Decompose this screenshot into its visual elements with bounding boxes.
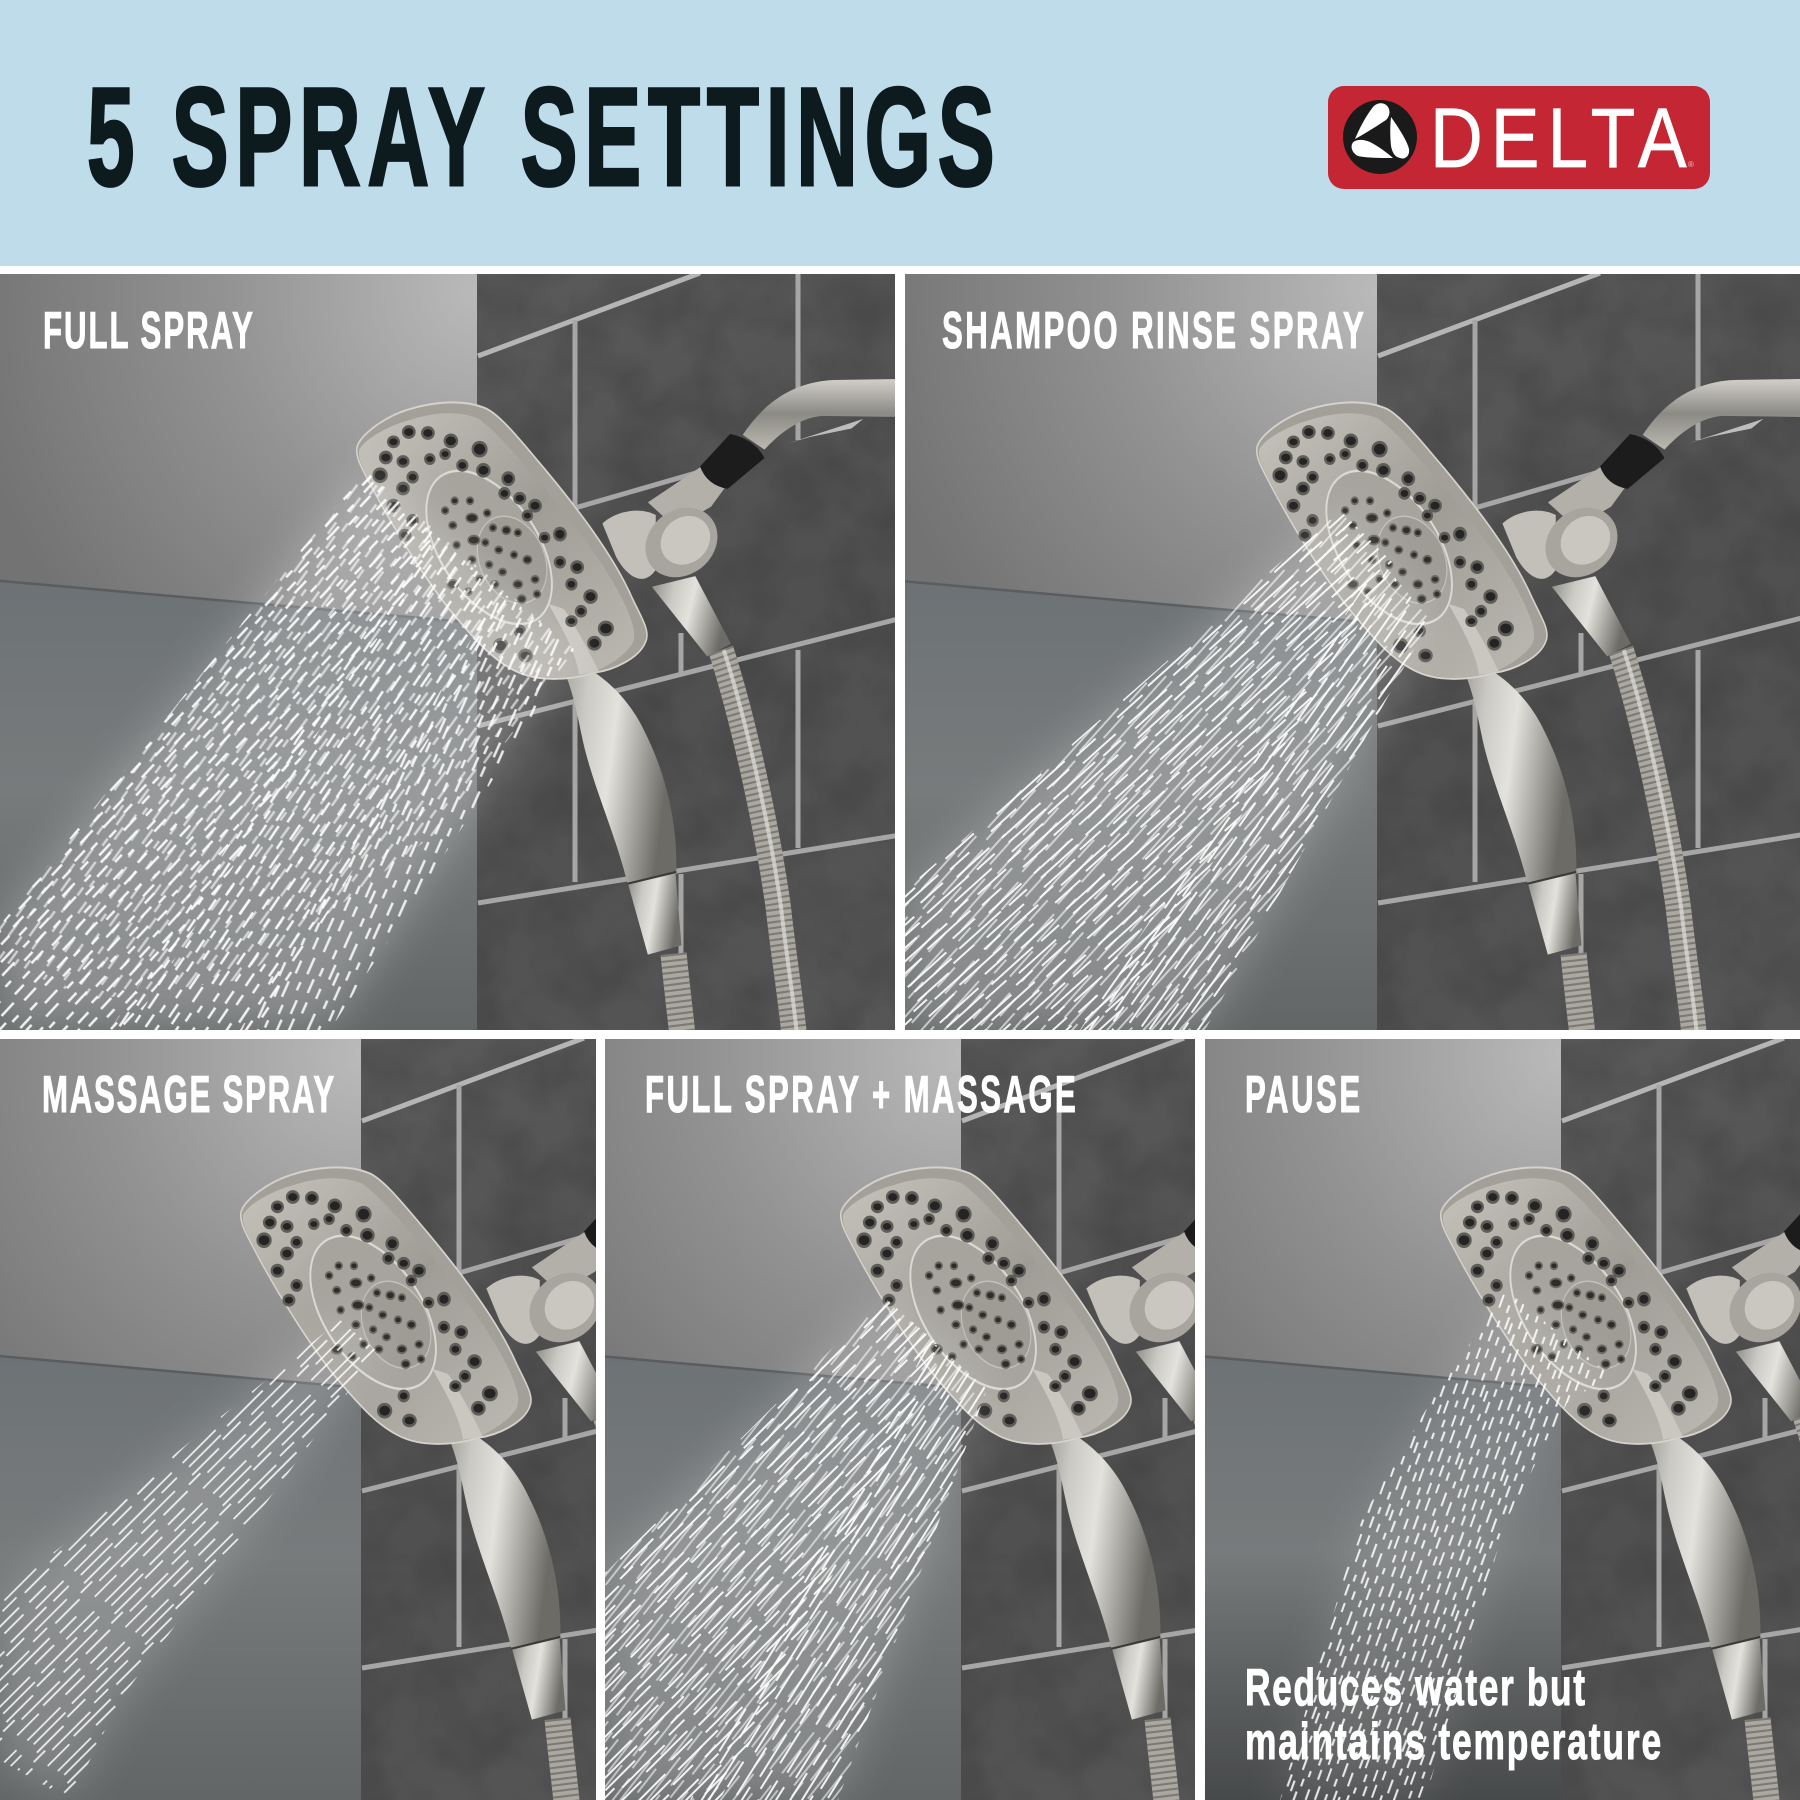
label: full spray + massage: FULL SPRAY + MASSAGE: [645, 1066, 1076, 1124]
panel: pause: [1205, 1039, 1800, 1800]
spray: pause trickle: [1280, 1290, 1610, 1800]
panel: massage spray: [0, 1039, 596, 1800]
spray: full spray: [0, 470, 575, 1030]
Delta logo: [1328, 86, 1710, 189]
text: pause description: maintains temperature: [1245, 1713, 1661, 1771]
Delta logo: DELTA: [1430, 91, 1687, 185]
panel: full spray + massage: [605, 1039, 1195, 1800]
spray: massage: [0, 1320, 378, 1800]
spray: shampoo rinse: [905, 510, 1430, 1030]
Delta logo: ®: [1688, 160, 1694, 169]
label: full spray: FULL SPRAY: [43, 302, 253, 360]
label: pause: PAUSE: [1245, 1066, 1360, 1124]
shower scene: [1074, 1035, 1800, 1800]
shower scene: [474, 1035, 1494, 1800]
panel: full spray: [0, 274, 895, 1030]
label: shampoo rinse spray: SHAMPOO RINSE SPRAY: [942, 302, 1364, 360]
text: pause description: Reduces water but: [1245, 1659, 1585, 1717]
label: massage spray: MASSAGE SPRAY: [42, 1066, 334, 1124]
header band: [0, 0, 1800, 266]
spray: full spray + massage: [605, 1297, 987, 1800]
shower scene: [890, 270, 1800, 1063]
bottom wall shade: [1205, 1550, 1561, 1800]
title: 5 SPRAY SETTINGS: [87, 58, 995, 215]
text: pause description: [1245, 1659, 1661, 1771]
panel: shampoo rinse spray: [905, 274, 1800, 1030]
shower scene: [0, 270, 1010, 1063]
shower scene: [0, 1035, 894, 1800]
